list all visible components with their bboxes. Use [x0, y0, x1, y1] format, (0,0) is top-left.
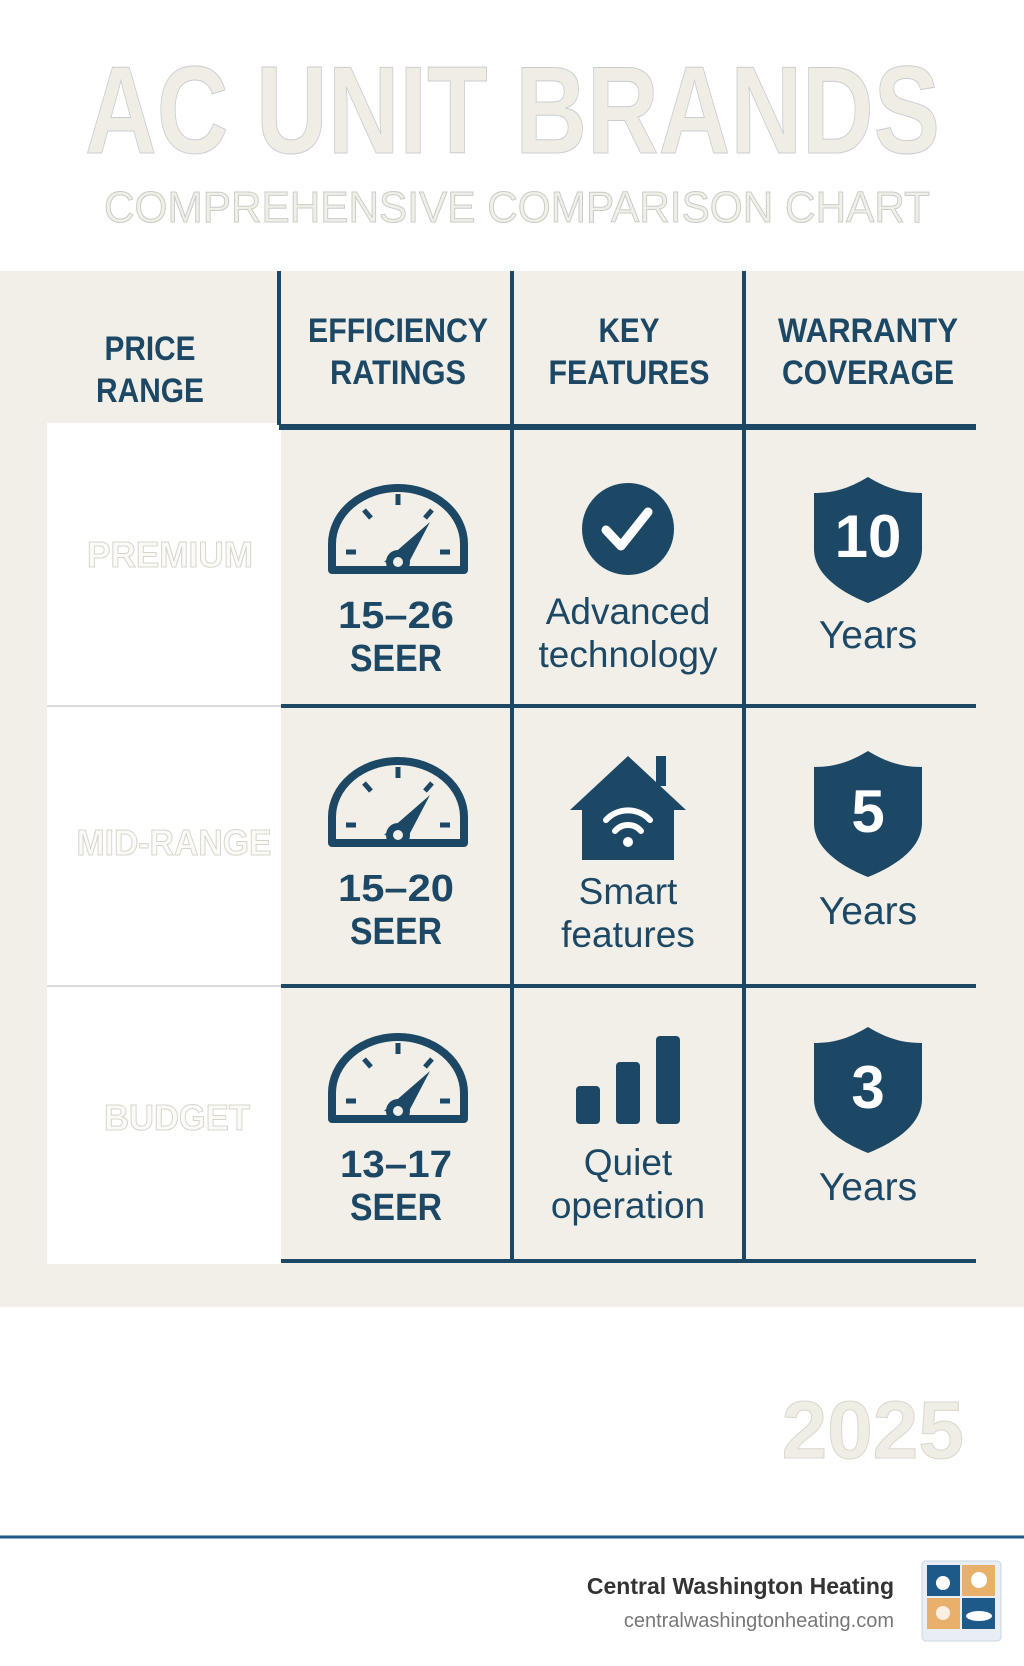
- text: 15-26 SEER: [338, 595, 454, 680]
- icon: shield 10: [814, 477, 922, 603]
- footer divider: [0, 1536, 1024, 1538]
- header: key features: KEY: [598, 312, 660, 350]
- header: price range: [96, 330, 204, 410]
- icon: shield 3: 3: [851, 1054, 885, 1121]
- icon: gauge premium: [332, 488, 464, 574]
- text: 10 years: Years: [819, 614, 917, 657]
- text: 15-26 SEER: SEER: [350, 638, 442, 680]
- icon: signal bars: [576, 1036, 680, 1124]
- header: efficiency ratings: EFFICIENCY: [308, 312, 488, 350]
- text: smart features: Smart: [579, 871, 678, 912]
- text: 3 years: Years: [819, 1166, 917, 1209]
- icon: gauge budget: [332, 1037, 464, 1123]
- icon: check circle: [582, 483, 674, 575]
- text: 15-20 SEER: SEER: [350, 911, 442, 953]
- panel: comparison table: [0, 271, 1024, 1307]
- header: price range: PRICE: [104, 330, 196, 368]
- icon: shield 10: 10: [835, 503, 901, 570]
- text: quiet operation: operation: [551, 1185, 705, 1226]
- text: quiet operation: Quiet: [584, 1142, 673, 1183]
- text: advanced technology: Advanced: [546, 591, 710, 632]
- text: 15-20 SEER: 15–20: [338, 868, 454, 910]
- row label: budget: BUDGET: [104, 1097, 250, 1138]
- text: 13-17 SEER: SEER: [350, 1187, 442, 1229]
- row label: mid-range: MID-RANGE: [76, 822, 272, 863]
- icon: shield 5: 5: [851, 778, 885, 845]
- header: warranty coverage: COVERAGE: [782, 354, 954, 392]
- icon: shield 3: [814, 1027, 922, 1153]
- header: warranty coverage: WARRANTY: [778, 312, 958, 350]
- text: 13-17 SEER: 13–17: [340, 1144, 452, 1186]
- text: 5 years: Years: [819, 890, 917, 933]
- text: smart features: features: [561, 914, 695, 955]
- header: key features: FEATURES: [548, 354, 710, 392]
- subtitle: COMPREHENSIVE COMPARISON CHART: [104, 183, 930, 232]
- text: 15-20 SEER: [338, 868, 454, 953]
- footer: company name: Central Washington Heating: [587, 1573, 894, 1599]
- header: efficiency ratings: RATINGS: [330, 354, 466, 392]
- row label: premium: PREMIUM: [87, 534, 253, 575]
- icon: company logo: [922, 1561, 1001, 1641]
- header: efficiency ratings: [308, 312, 488, 392]
- footer: url: centralwashingtonheating.com: [624, 1610, 894, 1632]
- header: price range: RANGE: [96, 372, 204, 410]
- text: 15-26 SEER: 15–26: [338, 595, 454, 637]
- text: advanced technology: technology: [539, 634, 718, 675]
- icon: gauge mid: [332, 761, 464, 847]
- year label: 2025: [782, 1385, 964, 1476]
- icon: shield 5: [814, 751, 922, 877]
- header: key features: [548, 312, 710, 392]
- icon: smart house: [570, 756, 686, 860]
- header: warranty coverage: [778, 312, 958, 392]
- text: 13-17 SEER: [340, 1144, 452, 1229]
